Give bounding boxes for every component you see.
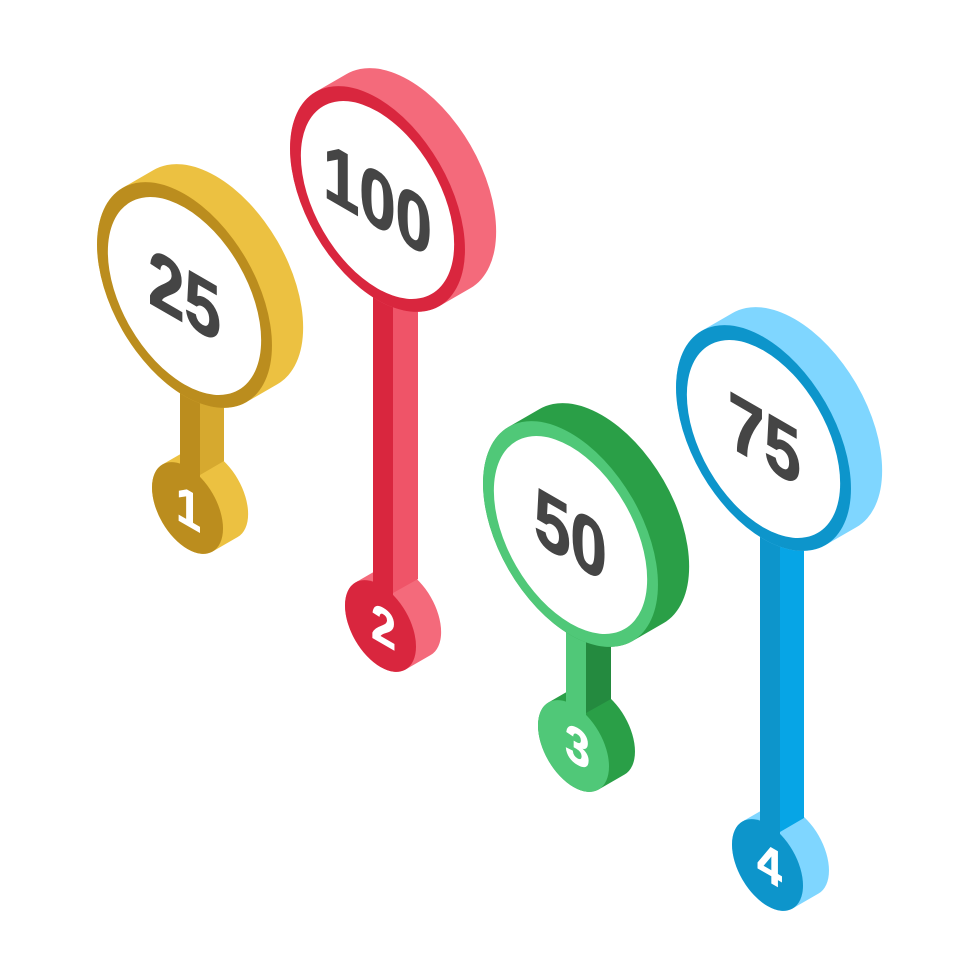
sign 1: yellow, value 25 <box>97 144 272 570</box>
value disc 25: 25 <box>148 231 221 361</box>
step number 4: 4 <box>757 829 782 900</box>
stem 2 <box>373 290 418 603</box>
sign 2: red, value 100 <box>290 48 465 688</box>
stem 4 <box>760 530 804 842</box>
stem 3 <box>566 620 611 723</box>
step number 1: 1 <box>176 473 201 544</box>
base disc 4 <box>732 804 803 926</box>
base disc 1 <box>152 446 223 570</box>
value disc 100 <box>290 48 465 350</box>
value disc 25 <box>97 144 272 446</box>
step number 2: 2 <box>371 591 396 662</box>
value disc 100: 100 <box>323 125 432 276</box>
value disc 75 <box>676 286 851 590</box>
step number 3: 3 <box>565 711 590 782</box>
sign 3: green, value 50 <box>483 382 658 808</box>
stem 1 <box>180 380 224 485</box>
base disc 2 <box>345 564 416 688</box>
sign 4: blue, value 75 <box>676 286 851 926</box>
value disc 50 <box>483 382 658 686</box>
value disc 50: 50 <box>534 470 607 600</box>
value disc 75: 75 <box>728 374 801 505</box>
base disc 3 <box>538 684 609 808</box>
